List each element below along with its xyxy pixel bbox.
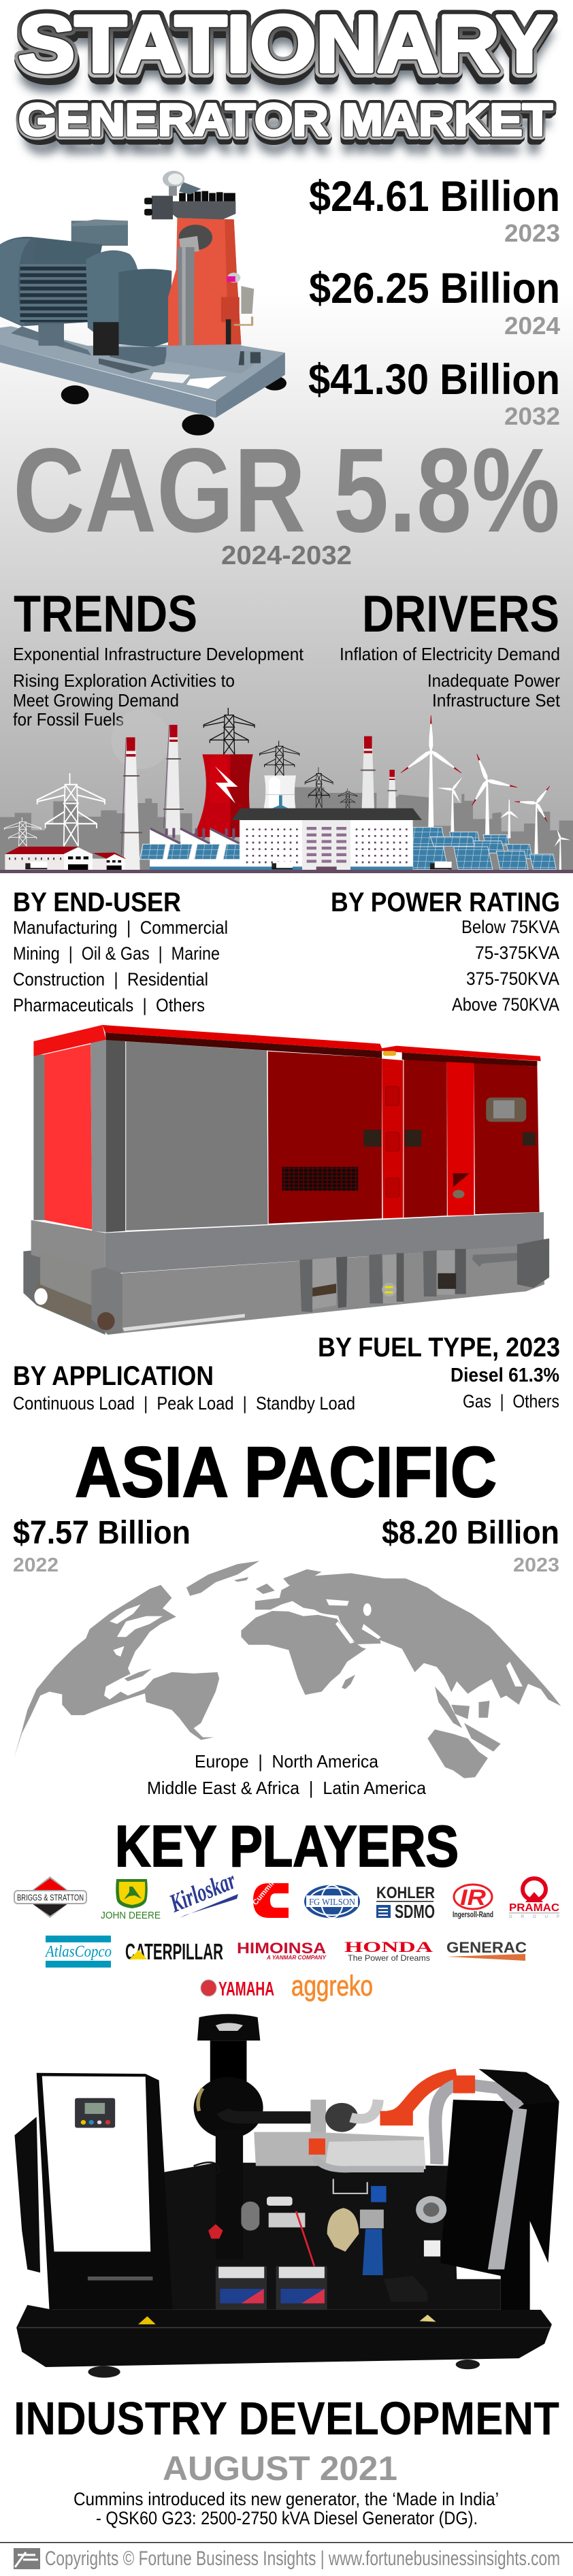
logo: Himoinsa: A YANMAR COMPANY (266, 1954, 327, 1961)
footer (14, 2547, 560, 2570)
logo: Cummins: Cummins (251, 1874, 280, 1907)
year 2032: 2032 (504, 402, 560, 430)
end-user list (13, 917, 228, 1015)
application heading: BY APPLICATION (13, 1361, 214, 1391)
logo: Honda: HONDA (344, 1938, 433, 1955)
title: Stationary Generator Market: STATIONARY (18, 0, 553, 89)
logo: Atlas Copco (44, 1936, 112, 1968)
year 2024: 2024 (504, 312, 560, 340)
title: Stationary Generator Market: STATIONARY (18, 3, 553, 93)
title: Stationary Generator Market: GENERATOR MARKET (18, 95, 553, 146)
end-user list: Construction | Residential (13, 969, 208, 990)
logo: Cummins (251, 1874, 289, 1918)
logo: Kirloskar (165, 1866, 240, 1919)
logo: Ingersoll Rand: IR (460, 1885, 486, 1910)
development text (73, 2489, 499, 2528)
end-user list: Manufacturing | Commercial (13, 917, 228, 938)
logo: FG Wilson: FG WILSON (309, 1897, 355, 1908)
date: AUGUST 2021 (163, 2449, 397, 2488)
title: Stationary Generator Market: GENERATOR MARKET (24, 110, 549, 162)
panel: by end-user (13, 887, 228, 1015)
driver items: Infrastructure Set (432, 690, 561, 711)
company logos (14, 1866, 559, 2002)
title: Stationary Generator Market: GENERATOR MARKET (18, 95, 553, 146)
trend items: Meet Growing Demand (13, 690, 179, 711)
title: Stationary Generator Market: STATIONARY (22, 7, 548, 97)
top background gradient (0, 293, 573, 871)
factories (5, 809, 452, 870)
year 2023: 2023 (504, 219, 560, 247)
driver items (340, 644, 561, 711)
logo: Himoinsa (237, 1940, 327, 1961)
cooling towers (193, 754, 296, 837)
diesel share: Diesel 61.3% (451, 1365, 559, 1386)
year 2022: 2022 (13, 1554, 59, 1576)
logo: John Deere: JOHN DEERE (101, 1910, 161, 1921)
logo: Kirloskar: Kirloskar (165, 1866, 240, 1919)
trend items: Exponential Infrastructure Development (13, 644, 304, 664)
power rating list (452, 917, 559, 1015)
panel: by application (13, 1361, 355, 1414)
power infrastructure skyline (0, 708, 573, 871)
panel: by power rating (331, 887, 560, 1015)
panel: industry development (14, 2392, 559, 2528)
ground line (0, 870, 573, 873)
power rating list: Above 750KVA (452, 994, 559, 1015)
logo: Himoinsa: HIMOINSA (237, 1940, 326, 1957)
logo: Briggs & Stratton (14, 1876, 86, 1918)
title: Stationary Generator Market: STATIONARY (18, 0, 553, 89)
end-user heading: BY END-USER (13, 887, 181, 917)
logo: Yamaha (201, 1978, 274, 2000)
chimneys (120, 725, 397, 870)
logo: Honda: The Power of Dreams (348, 1953, 430, 1963)
panel: trends (13, 585, 304, 730)
title: Stationary Generator Market: GENERATOR MARKET (18, 95, 553, 146)
other regions list (147, 1751, 427, 1798)
logo: Pramac: GROUP (509, 1915, 559, 1919)
trends heading: TRENDS (14, 585, 197, 643)
generator set enclosure illustration (23, 1025, 549, 1335)
other regions list: Middle East & Africa | Latin America (147, 1778, 427, 1798)
title: Stationary Generator Market: GENERATOR MARKET (21, 100, 550, 151)
logo: Pramac: PRAMAC (509, 1902, 559, 1914)
driver items: Inflation of Electricity Demand (340, 644, 560, 664)
title: Stationary Generator Market: GENERATOR MARKET (19, 97, 552, 148)
logo: Kohler SDMO: SDMO (395, 1901, 435, 1922)
application list: Continuous Load | Peak Load | Standby Load (13, 1393, 355, 1414)
title: Stationary Generator Market: STATIONARY (20, 5, 550, 95)
logo: John Deere (101, 1879, 161, 1921)
title: Stationary Generator Market (18, 0, 553, 162)
trend items (13, 644, 304, 730)
logo: Kohler SDMO: KOHLER (376, 1884, 435, 1902)
logo: Atlas Copco: AtlasCopco (44, 1943, 112, 1961)
Asia Pacific 2022 value: $7.57 Billion (13, 1515, 191, 1551)
power rating list: 75-375KVA (475, 943, 559, 963)
CAGR period: 2024-2032 (221, 541, 352, 570)
diesel engine generator illustration (14, 2014, 559, 2378)
logo: Yamaha: YAMAHA (218, 1978, 274, 2000)
transmission towers (4, 708, 357, 846)
logo: FG Wilson (304, 1885, 360, 1918)
title: Stationary Generator Market: STATIONARY (20, 16, 552, 106)
logo: Aggreko: aggreko (291, 1970, 373, 2002)
world globe map (14, 1561, 561, 1778)
title: Stationary Generator Market: STATIONARY (18, 0, 553, 89)
logo: Pramac (509, 1878, 559, 1919)
panel: by fuel type (318, 1333, 560, 1412)
icon: Fortune Business Insights mark (14, 2548, 40, 2569)
Asia Pacific 2023 value: $8.20 Billion (382, 1515, 559, 1551)
development text: - QSK60 G23: 2500-2750 kVA Diesel Generator (DG). (96, 2508, 478, 2528)
end-user list: Mining | Oil & Gas | Marine (13, 943, 220, 964)
heading: Asia Pacific: ASIA PACIFIC (75, 1433, 497, 1512)
power rating list: Below 75KVA (461, 917, 559, 937)
year 2023: 2023 (513, 1554, 559, 1576)
logo: Ingersoll Rand: Ingersoll-Rand (453, 1910, 493, 1919)
driver items: Inadequate Power (427, 670, 560, 691)
trend items: for Fossil Fuels (13, 709, 124, 730)
footer rule (0, 2542, 573, 2543)
logo: Briggs & Stratton: BRIGGS & STRATTON (17, 1892, 84, 1903)
trend items: Rising Exploration Activities to (13, 670, 235, 691)
power rating list: 375-750KVA (466, 968, 559, 989)
logo: Honda (344, 1938, 433, 1963)
logo: Ingersoll Rand (453, 1885, 493, 1919)
pump and motor illustration (0, 171, 286, 436)
logo: Caterpillar: CATERPILLAR (125, 1939, 223, 1964)
market value figures (308, 173, 560, 430)
solar panels (413, 828, 556, 869)
development text: Cummins introduced its new generator, the ‘Made in India’ (73, 2489, 499, 2509)
other regions list: Europe | North America (195, 1751, 379, 1772)
logo: Generac: GENERAC (446, 1939, 527, 1956)
heading: Key Players: KEY PLAYERS (115, 1814, 459, 1879)
wind turbines (399, 715, 571, 870)
logo: Caterpillar (125, 1939, 223, 1964)
logo: Kohler SDMO (376, 1884, 435, 1922)
end-user list: Pharmaceuticals | Others (13, 995, 205, 1015)
panel: drivers (340, 585, 561, 711)
